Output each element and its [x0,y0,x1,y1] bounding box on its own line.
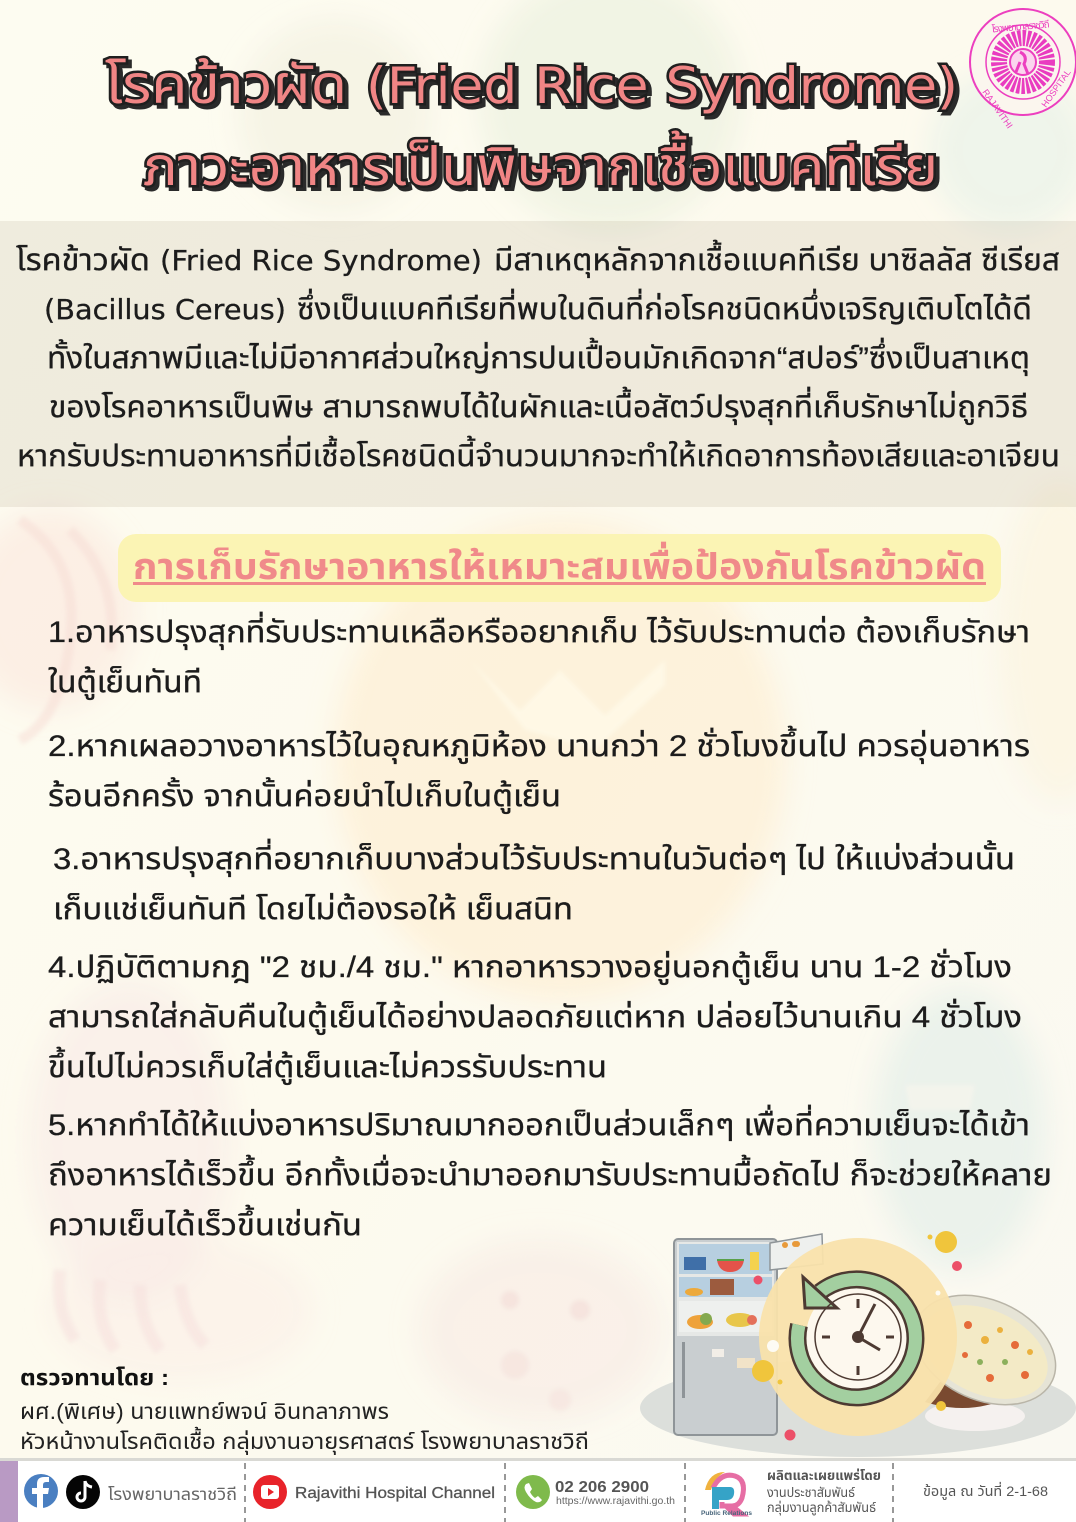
illustration: fridge, clock and fried rice [640,1231,1076,1457]
title [105,55,962,200]
label: phone number and website: 02 206 2900 [555,1479,649,1496]
text block: reviewer: หัวหน้างานโรคติดเชื้อ กลุ่มงานอายุรศาสตร์ โรงพยาบาลราชวิถี [20,1426,589,1455]
title line 1: โรคข้าวผัด [108,58,350,118]
icon: hospital logo: RAJAVITHI [980,87,1015,130]
icon: hospital logo: โรงพยาบาลราชวิถี [991,18,1050,35]
step 4: 4.ปฏิบัติตามกฎ "2 ชม./4 ชม." หากอาหารวางอยู่นอกตู้เย็น นาน 1-2 ชั่วโมง [48,948,1012,985]
icon: youtube [253,1475,287,1509]
title line 1 [105,55,962,118]
icon: hospital logo: HOSPITAL [1039,67,1073,109]
text block: reviewer [20,1365,589,1455]
step 5: ถึงอาหารได้เร็วขึ้น อีกทั้งเมื่อจะนำมาออกมารับประทานมื้อถัดไป ก็จะช่วยให้คลาย [48,1154,1052,1192]
intro paragraph: โรคข้าวผัด [16,244,150,277]
title line 2: ภาวะอาหารเป็นพิษจากเชื้อแบคทีเรีย [143,130,938,197]
step 1: ในตู้เย็นทันที [48,666,202,700]
label: produced by: กลุ่มงานลูกค้าสัมพันธ์ [767,1500,876,1515]
step 2: ร้อนอีกครั้ง จากนั้นค่อยนำไปเก็บในตู้เย็น [48,777,561,814]
step 5 [48,1104,1052,1242]
text block: reviewer: ตรวจทานโดย : [20,1365,169,1390]
icon: hospital logo [970,9,1076,130]
label: produced by: งานประชาสัมพันธ์ [767,1485,855,1500]
icon: clock with return arrow [759,1238,957,1436]
icon: fried rice bowl [897,1274,1073,1431]
step 3 [53,838,1015,926]
heading: food storage [118,534,1001,602]
footer bar [0,1458,1076,1522]
icon: tiktok [66,1475,100,1509]
icon: public relations logo [701,1472,752,1517]
label: youtube channel: Rajavithi Hospital Channel [295,1485,495,1502]
label: produced by [767,1468,881,1515]
heading: food storage: การเก็บรักษาอาหารให้เหมาะสมเพื่อป้องกันโรคข้าวผัด [133,541,986,587]
text block: storage steps [48,611,1052,1242]
intro paragraph: ซึ่งเป็นแบคทีเรียที่พบในดินที่ก่อโรคชนิดหนึ่งเจริญเติบโตได้ดี [297,288,1032,326]
label: phone number and website [555,1479,675,1507]
intro paragraph: มีสาเหตุหลักจากเชื้อแบคทีเรีย บาซิลลัส ซีเรียส [494,239,1060,278]
intro paragraph [16,239,1060,473]
step 5: ความเย็นได้เร็วขึ้นเช่นกัน [48,1204,362,1242]
intro paragraph: (Bacillus Cereus) [44,293,286,326]
icon: fridge [674,1234,823,1435]
step 5: 5.หากทำได้ให้แบ่งอาหารปริมาณมากออกเป็นส่วนเล็กๆ เพื่อที่ความเย็นจะได้เข้า [48,1104,1030,1142]
step 3: 3.อาหารปรุงสุกที่อยากเก็บบางส่วนไว้รับประทานในวันต่อๆ ไป ให้แบ่งส่วนนั้น [53,838,1015,877]
step 1 [48,611,1030,700]
step 2 [48,725,1030,814]
label: produced by: ผลิตและเผยแพร่โดย [767,1468,881,1483]
step 4: ขึ้นไปไม่ควรเก็บใส่ตู้เย็นและไม่ควรรับประทาน [48,1046,607,1085]
text block: reviewer: ผศ.(พิเศษ) นายแพทย์พจน์ อินทลาภาพร [20,1399,389,1424]
title line 1: (Fried Rice Syndrome) [370,60,962,118]
decorative dots [752,1231,962,1440]
label: hospital name: โรงพยาบาลราชวิถี [108,1485,237,1504]
intro paragraph: หากรับประทานอาหารที่มีเชื้อโรคชนิดนี้จำนวนมากจะทำให้เกิดอาการท้องเสียและอาเจียน [17,435,1060,473]
step 2: 2.หากเผลอวางอาหารไว้ในอุณหภูมิห้อง นานกว่า 2 ชั่วโมงขึ้นไป ควรอุ่นอาหาร [48,725,1030,764]
panel: introduction [0,221,1076,507]
label: phone number and website: https://www.rajavithi.go.th [556,1496,675,1507]
title line 1: โรคข้าวผัด [105,55,347,115]
icon: phone [516,1475,550,1509]
title line 2: ภาวะอาหารเป็นพิษจากเชื้อแบคทีเรีย [146,134,942,200]
step 3: เก็บแช่เย็นทันที โดยไม่ต้องรอให้ เย็นสนิท [53,893,573,926]
icon: public relations logo: Public Relations [701,1510,752,1517]
title line 1: (Fried Rice Syndrome) [366,57,958,115]
intro paragraph: ของโรคอาหารเป็นพิษ สามารถพบได้ในผักและเนื้อสัตว์ปรุงสุกที่เก็บรักษาไม่ถูกวิธี [49,386,1028,425]
intro paragraph: ทั้งในสภาพมีและไม่มีอากาศส่วนใหญ่การปนเปื้อนมักเกิดจาก“สปอร์”ซึ่งเป็นสาเหตุ [47,337,1030,376]
step 1: 1.อาหารปรุงสุกที่รับประทานเหลือหรืออยากเก็บ ไว้รับประทานต่อ ต้องเก็บรักษา [48,611,1030,650]
intro paragraph: (Fried Rice Syndrome) [160,244,482,277]
icon: facebook [24,1474,58,1508]
step 4: สามารถใส่กลับคืนในตู้เย็นได้อย่างปลอดภัยแต่หาก ปล่อยไว้นานเกิน 4 ชั่วโมง [48,998,1022,1035]
label: data date: ข้อมูล ณ วันที่ 2-1-68 [923,1481,1048,1500]
step 4 [48,948,1022,1085]
